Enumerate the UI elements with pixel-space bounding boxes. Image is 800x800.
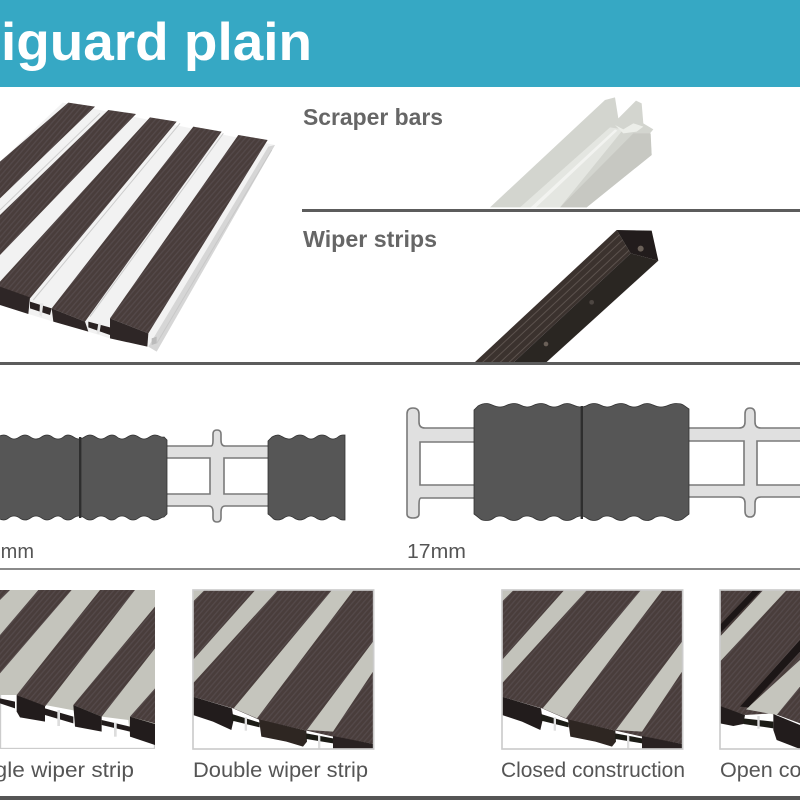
wiper block pair (0, 435, 167, 520)
thumbnail: single wiper strip (0, 590, 155, 749)
cross section: left profile (0, 430, 345, 522)
caption: closed construction: Closed construction (501, 759, 685, 782)
divider (0, 362, 800, 365)
ladder rail right (687, 408, 800, 517)
cross section: right profile (407, 404, 800, 520)
thumbnail: closed construction (502, 590, 683, 749)
caption: double wiper strip: Double wiper strip (193, 759, 368, 782)
ladder rail left (407, 408, 476, 518)
divider (0, 568, 800, 570)
bottom rule (0, 796, 800, 800)
thumbnail: open construction (720, 590, 800, 749)
label: wiper strips: Wiper strips (303, 226, 437, 252)
caption: 17mm: 17mm (407, 541, 466, 563)
wiper block pair (474, 404, 689, 520)
header band (0, 0, 800, 87)
thumbnail: double wiper strip (193, 590, 374, 749)
ladder rails (165, 430, 270, 522)
wiper block single (268, 435, 345, 520)
product photo: entrance mat (0, 103, 275, 352)
label: scraper bars: Scraper bars (303, 104, 443, 130)
divider (302, 209, 800, 212)
title: iguard plain (1, 13, 312, 72)
image: wiper strip (475, 230, 658, 362)
image: scraper bar (490, 97, 653, 207)
